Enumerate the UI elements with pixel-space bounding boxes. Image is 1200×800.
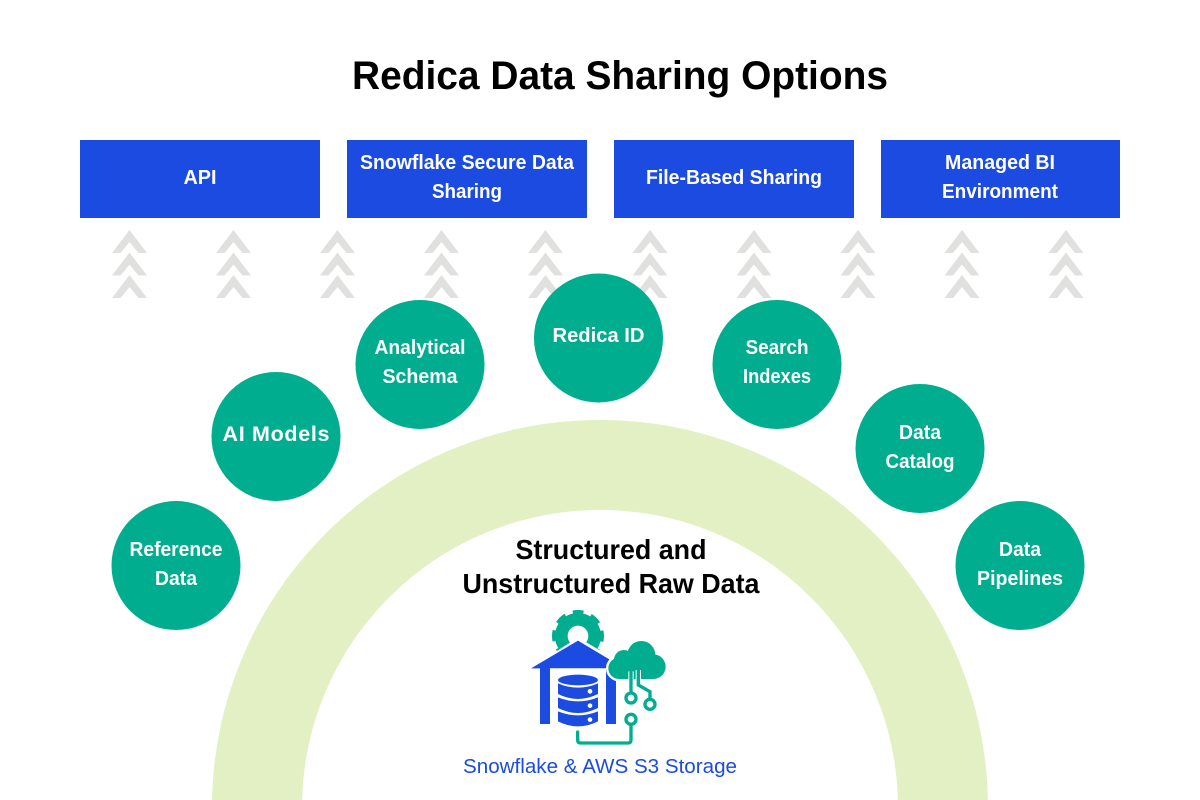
icon: cloud (578, 641, 666, 743)
box: Snowflake Secure Data Sharing: Snowflake Secure Data (360, 152, 575, 174)
arch: raw data foundation (257, 465, 943, 800)
box: Managed BI Environment: Environment (942, 181, 1058, 203)
box: Managed BI Environment: Managed BI (945, 152, 1055, 174)
circle: Data Catalog (856, 384, 984, 513)
circle: AI Models (212, 372, 340, 501)
circle: Data Pipelines: Pipelines (977, 568, 1063, 590)
icon: warehouse (525, 637, 616, 727)
panel: data product circles (112, 274, 1084, 630)
heading: Structured and Unstructured Raw Data: Unstructured Raw Data (462, 568, 760, 599)
box: Managed BI Environment (881, 140, 1120, 218)
circle: Search Indexes: Indexes (743, 366, 811, 388)
box: Snowflake Secure Data Sharing: Sharing (432, 181, 502, 203)
circle: Analytical Schema: Schema (382, 366, 458, 388)
circle: Search Indexes: Search (746, 337, 808, 359)
circle: Data Pipelines (956, 501, 1084, 630)
heading: Structured and Unstructured Raw Data (462, 534, 760, 599)
icon: database (558, 675, 598, 726)
circle: Search Indexes (712, 300, 842, 429)
box: API: API (184, 167, 216, 189)
caption: Snowflake & AWS S3 Storage: Snowflake & AWS S3 Storage (463, 756, 737, 778)
circle: Analytical Schema (356, 300, 484, 429)
circle: Data Catalog: Data (899, 422, 942, 444)
panel: sharing options (80, 140, 1120, 218)
circle: Reference Data: Data (155, 568, 198, 590)
circle: Data Pipelines: Data (999, 539, 1042, 561)
box: Snowflake Secure Data Sharing (347, 140, 587, 218)
box: File-Based Sharing (614, 140, 854, 218)
box: File-Based Sharing: File-Based Sharing (646, 167, 822, 189)
circle: Data Catalog: Catalog (886, 451, 954, 473)
icon: warehouse, database and cloud (525, 613, 666, 743)
box: API (80, 140, 320, 218)
heading: Structured and Unstructured Raw Data: Structured and (516, 534, 706, 565)
circle: Redica ID: Redica ID (552, 325, 644, 347)
circle: Reference Data (112, 501, 240, 630)
title: Redica Data Sharing Options (352, 54, 888, 98)
circle: Reference Data: Reference (130, 539, 222, 561)
circle: Analytical Schema: Analytical (374, 337, 466, 359)
icon: gear (555, 613, 601, 659)
arrows: upward chevrons (112, 230, 1084, 298)
circle: AI Models: AI Models (222, 422, 330, 446)
circle: Redica ID (534, 274, 663, 402)
